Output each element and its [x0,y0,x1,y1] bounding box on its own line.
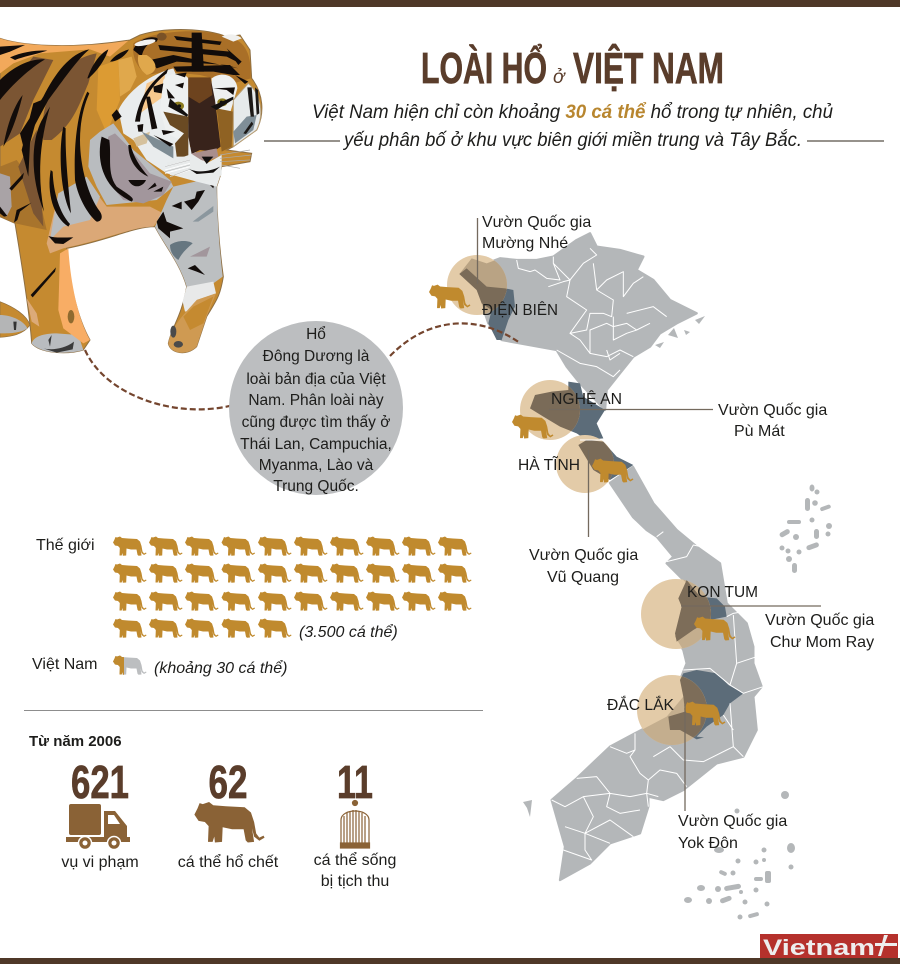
map labels: Yok Đôn [678,835,738,852]
map labels: ĐẮC LẮK [607,695,674,714]
pictogram: world tigers: Thế giới [36,537,95,554]
map labels: Vườn Quốc gia [678,813,787,830]
map labels: Vườn Quốc gia [765,612,874,629]
callout circle: Trung Quốc. [273,478,359,495]
callout circle: Myanma, Lào và [259,457,374,474]
bottom bar [0,958,900,964]
logo: Vietnam [763,935,875,960]
callout circle: loài bản địa của Việt [246,371,386,388]
stat: dead tigers: 62 [208,756,248,808]
body stripes [0,45,215,297]
stat: seized: 11 [337,756,373,808]
map labels: ĐIỆN BIÊN [482,300,558,319]
title [421,42,724,93]
islands: Hoàng Sa [779,484,832,573]
map of Vietnam [447,233,832,920]
icon: cage [340,800,370,848]
map labels: KON TUM [687,584,758,601]
title: LOÀI HỔ [421,42,547,93]
callout circle: Đông Dương là [263,348,370,365]
shading [0,38,128,73]
head [133,31,251,83]
top bar [0,0,900,7]
subtitle: yếu phân bố ở khu vực biên giới miền trung và Tây Bắc. [342,130,802,151]
stat: violations: 621 [71,756,129,808]
map labels: Vũ Quang [547,569,619,586]
subtitle: Việt Nam hiện chỉ còn khoảng 30 cá thể hổ trong tự nhiên, chủ [312,102,833,123]
title: ở [553,67,566,88]
illustration: tiger [0,30,262,353]
stat: violations: vụ vi phạm [61,854,139,871]
province borders south [552,507,763,860]
map labels: Chư Mom Ray [770,634,874,651]
icon: truck [66,804,130,850]
head stripes [112,33,248,147]
callout circle: cũng được tìm thấy ở [242,414,390,431]
callout circle: Nam. Phân loài này [248,392,384,409]
callout circle: Thái Lan, Campuchia, [240,436,392,453]
leader lines [478,218,821,811]
map labels: HÀ TĨNH [518,454,580,474]
map labels: NGHỆ AN [551,389,622,408]
pictogram: world tigers: (3.500 cá thể) [299,623,398,641]
stat: dead tigers [178,756,279,871]
pictogram: world tigers [36,536,472,641]
logo [760,934,898,960]
pictogram: Vietnam tigers [32,656,287,677]
stat: seized: bị tịch thu [321,873,389,890]
islands: Trường Sa [684,791,795,920]
dashed connector [85,323,520,409]
subtitle [312,102,833,151]
stat: dead tigers: cá thể hổ chết [178,853,279,871]
map labels: Vườn Quốc gia [482,214,591,231]
map labels: Mường Nhé [482,235,568,252]
pictogram: Vietnam tigers: Việt Nam [32,656,98,673]
map tigers [429,285,735,725]
map labels: Vườn Quốc gia [529,547,638,564]
pictogram: Vietnam tigers: (khoảng 30 cá thể) [154,659,287,677]
stat: seized: cá thể sống [314,851,396,869]
stat: seized [314,756,396,890]
park circles [447,255,711,745]
callout circle [229,321,403,495]
map labels: Vườn Quốc gia [718,402,827,419]
icon: tiger [194,802,265,842]
map labels: Pù Mát [734,423,785,440]
callout circle: Hổ [306,326,326,343]
stat: violations [61,756,139,871]
map labels [482,214,874,852]
title: VIỆT NAM [573,43,724,93]
stats heading: Từ năm 2006 [29,733,122,750]
province borders north [517,248,667,440]
